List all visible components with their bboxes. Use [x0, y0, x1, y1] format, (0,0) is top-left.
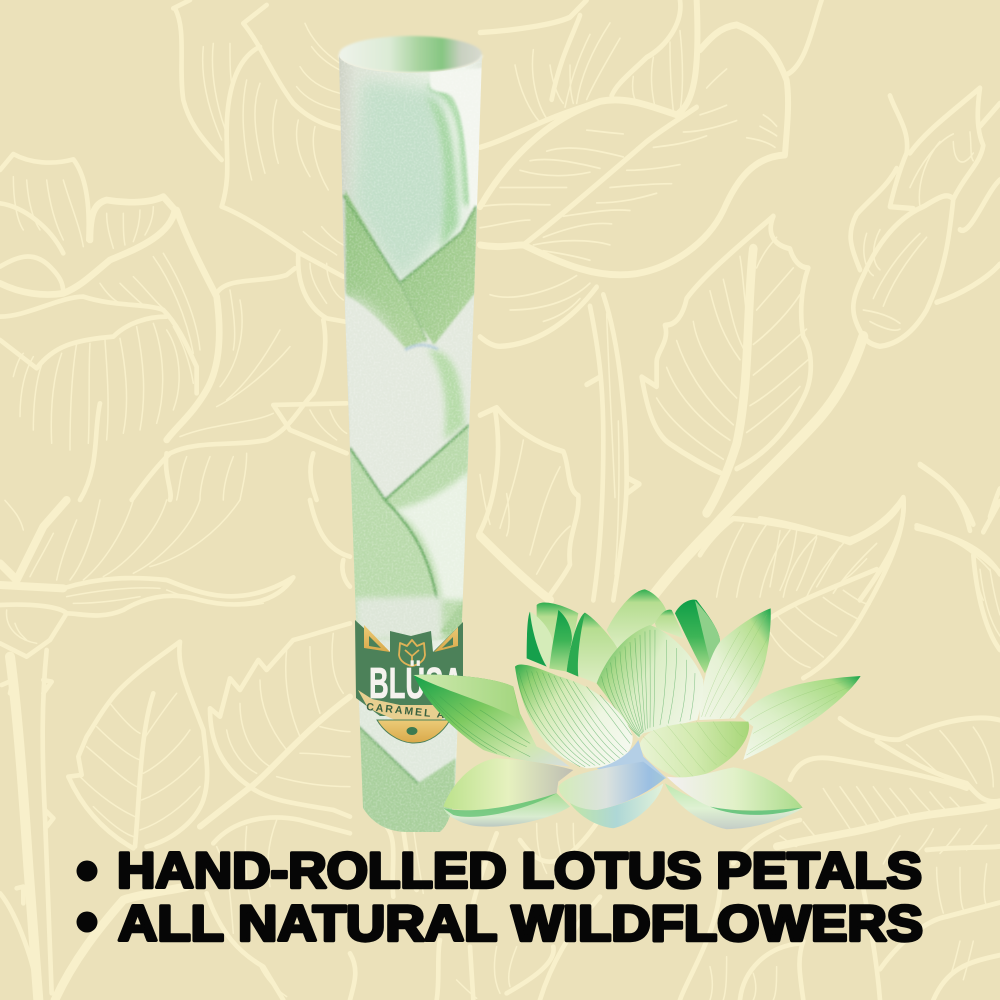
- caption: product benefits: [76, 842, 923, 952]
- right front petal: [640, 721, 749, 780]
- petal outlines behind the caption: [350, 820, 800, 1000]
- gold flavour strip: [358, 690, 462, 720]
- center large petal: [597, 625, 703, 738]
- rolled lotus petal cone: [335, 30, 485, 840]
- front petal veins: [643, 722, 743, 777]
- bullet: all natural wildflowers: ALL NATURAL WILDFLOWERS: [118, 896, 923, 952]
- right long petal veins: [747, 680, 850, 755]
- left petal veins: [517, 671, 632, 767]
- gold chevrons: [364, 625, 458, 652]
- lower right petals: [665, 767, 803, 829]
- brand name: BLÜSA: [369, 659, 463, 708]
- big left petal: [515, 664, 633, 768]
- gold shield emblem: [377, 720, 450, 743]
- left long petal veins: [423, 687, 530, 757]
- right upright petal: [699, 608, 771, 720]
- icon: tulip logo: [399, 640, 425, 666]
- lower left petals: [443, 758, 573, 827]
- stem and leaf outlines, lower left: [0, 500, 350, 1000]
- rose outline, upper left: [0, 0, 347, 500]
- blue heart of the flower: [597, 740, 667, 780]
- left long petal: [413, 675, 570, 767]
- label band: BLUSA caramel apple: [355, 620, 463, 743]
- upright petal veins: [702, 615, 768, 718]
- center petal veins: [602, 630, 695, 737]
- right long petal: [740, 676, 861, 760]
- flavour name: CARAMEL A: [366, 701, 447, 721]
- lotus flower: [413, 589, 861, 829]
- bullet: hand-rolled lotus petals: HAND-ROLLED LOTUS PETALS: [117, 842, 922, 898]
- leaf outlines, lower right: [760, 464, 1000, 1000]
- back petals: [527, 589, 720, 683]
- shield ornament: [406, 727, 418, 735]
- lower centre petals: [558, 762, 665, 828]
- rose, bud and leaf outlines, upper right: [480, 0, 1000, 600]
- cone body with wrapped petals: [335, 30, 485, 840]
- cone opening: [339, 36, 482, 73]
- band green body: [355, 620, 463, 716]
